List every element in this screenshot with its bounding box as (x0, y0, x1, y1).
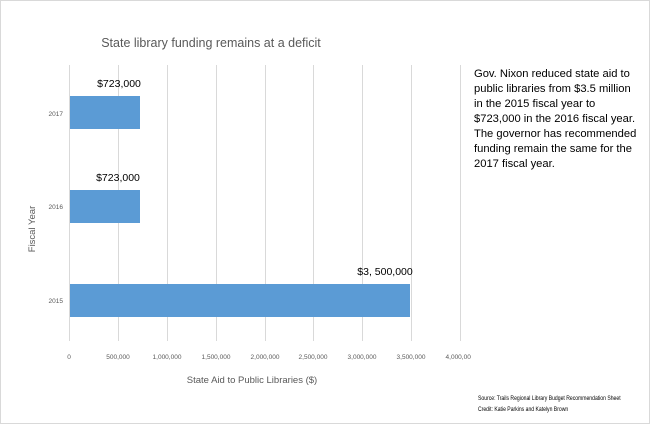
title: State library funding remains at a deficit (101, 36, 321, 50)
x axis title: State Aid to Public Libraries ($) (187, 375, 317, 386)
text block: summary: $723,000 in the 2016 fiscal year. (474, 113, 635, 125)
text block: summary: The governor has recommended (474, 128, 636, 140)
text block: summary (474, 68, 636, 170)
x tick labels (67, 354, 475, 361)
y tick labels: 2015 (49, 298, 63, 305)
x tick labels: 1,000,000 (153, 354, 182, 361)
data labels: $723,000 (97, 78, 141, 90)
y tick labels: 2017 (49, 111, 63, 118)
text block: summary: in the 2015 fiscal year to (474, 98, 595, 110)
bars (70, 96, 410, 317)
y axis title: Fiscal Year (27, 206, 38, 252)
y tick labels: 2016 (49, 204, 63, 211)
x tick labels: 2,000,000 (251, 354, 280, 361)
y tick labels (49, 111, 63, 305)
data labels (96, 78, 413, 278)
x tick labels: 1,500,000 (202, 354, 231, 361)
data labels: $3, 500,000 (357, 266, 413, 278)
x tick labels: 0 (67, 354, 71, 361)
text block: summary: 2017 fiscal year. (474, 158, 555, 170)
x tick labels: 3,000,000 (348, 354, 377, 361)
chart (27, 36, 471, 386)
x tick labels: 500,000 (106, 354, 130, 361)
data labels: $723,000 (96, 172, 140, 184)
x tick labels: 2,500,000 (299, 354, 328, 361)
x tick labels: 3,500,000 (397, 354, 426, 361)
source credit: Credit: Katie Parkins and Katelyn Brown (478, 406, 568, 413)
text block: summary: funding remain the same for the (474, 143, 632, 155)
text block: summary: public libraries from $3.5 million (474, 83, 631, 95)
text block: summary: Gov. Nixon reduced state aid to (474, 68, 630, 80)
source credit: Source: Trails Regional Library Budget Recommendation Sheet (478, 395, 621, 402)
source credit (478, 395, 621, 413)
